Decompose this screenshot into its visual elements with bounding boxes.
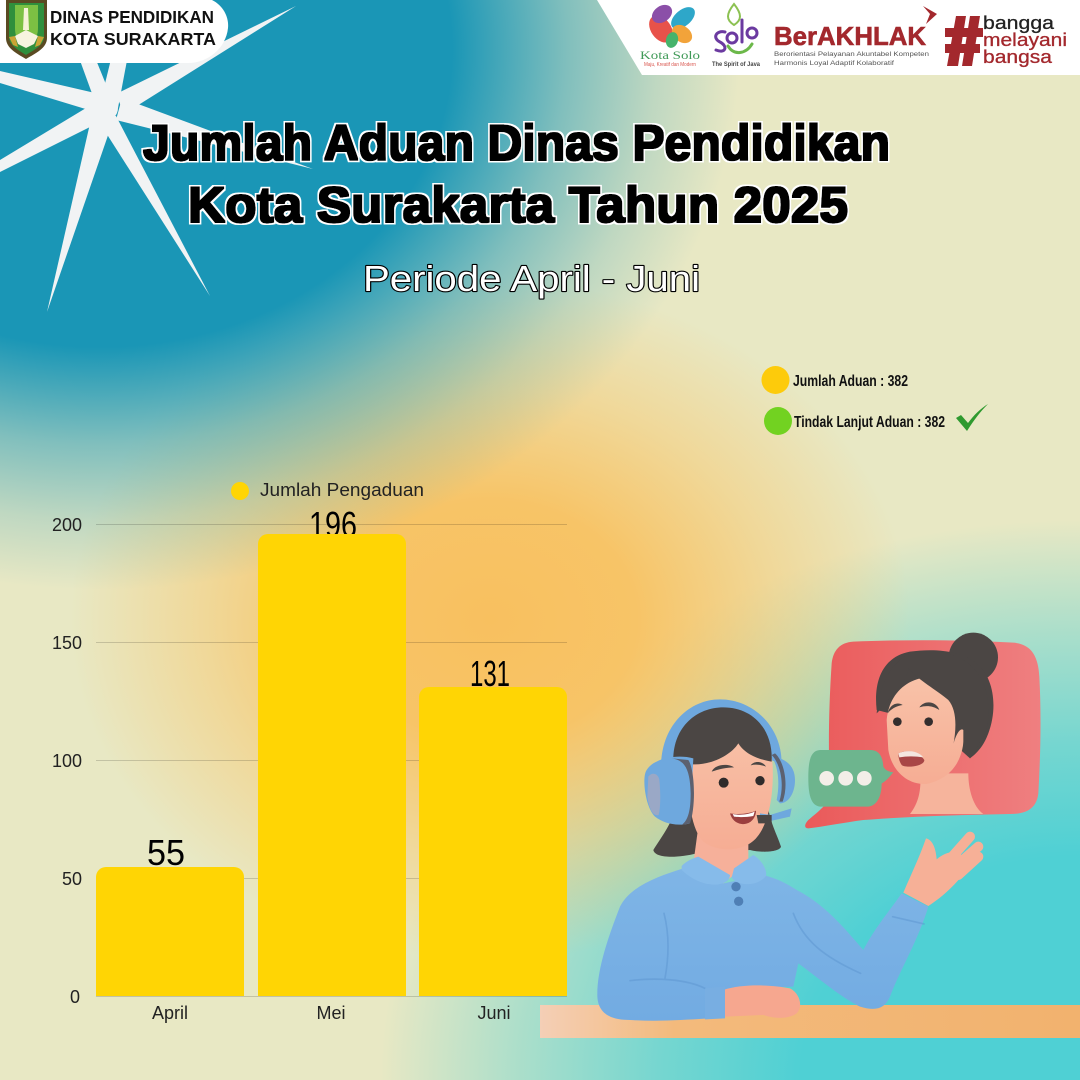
value labels: 131 [470, 653, 510, 694]
speech bubble: green typing [808, 750, 893, 807]
logo: Kota Solo: Maju, Kreatif dan Modern [644, 62, 696, 68]
headset earcups [644, 753, 795, 825]
icon: Surakarta coat of arms [6, 0, 47, 59]
bar chart [52, 480, 567, 1023]
operator eyes, brows [712, 762, 766, 788]
customer hair back and bun [876, 633, 998, 758]
customer ear [962, 721, 982, 753]
illustration: call centre conversation [597, 633, 1041, 1021]
bar: Mei 196 [258, 534, 406, 996]
legend: jumlah aduan [762, 366, 908, 394]
logo: BerAKHLAK: BerAKHLAK [774, 21, 926, 51]
logo: BerAKHLAK [774, 6, 937, 67]
customer mouth [898, 751, 924, 767]
agency name [50, 7, 216, 49]
operator neck [693, 827, 748, 883]
logo: Solo The Spirit of Java [712, 4, 761, 68]
header panel: Dinas Pendidikan [0, 0, 228, 63]
logo: BerAKHLAK: Harmonis Loyal Adaptif Kolaboratif [774, 60, 894, 67]
logo: bangga melayani bangsa [945, 12, 1067, 67]
summary legend [762, 366, 988, 435]
value labels: 196 [309, 504, 357, 545]
x axis labels: Mei [316, 1003, 346, 1023]
operator hair back [653, 800, 781, 857]
title: Kota Surakarta Tahun 2025 [188, 177, 848, 233]
customer eyes and brows [888, 702, 939, 726]
y axis labels: 100 [52, 751, 82, 771]
starburst decoration [0, 6, 313, 312]
value labels: 55 [147, 832, 185, 873]
customer face [887, 678, 964, 784]
logo: bangga melayani bangsa: melayani [983, 29, 1067, 50]
operator shirt [597, 868, 928, 1021]
logo: BerAKHLAK: Berorientasi Pelayanan Akuntabel Kompeten [774, 51, 929, 58]
operator headset band [661, 699, 782, 777]
shirt buttons [731, 882, 743, 906]
title: Jumlah Aduan Dinas Pendidikan [143, 115, 890, 171]
legend: tindak lanjut: Tindak Lanjut Aduan : 382 [794, 414, 945, 431]
value labels [147, 504, 510, 873]
title [143, 115, 890, 233]
legend: jumlah aduan: Jumlah Aduan : 382 [793, 373, 908, 390]
agency name: KOTA SURAKARTA [50, 29, 216, 49]
operator hair front [673, 707, 772, 793]
x axis labels: April [152, 1003, 188, 1023]
customer neck [910, 773, 983, 814]
logo: Kota Solo [640, 1, 700, 68]
y axis labels: 0 [70, 987, 80, 1007]
shirt cuff [705, 987, 725, 1019]
agency name: DINAS PENDIDIKAN [50, 7, 214, 27]
icon: check mark [956, 404, 988, 431]
table [540, 1005, 1080, 1038]
header panel: partner logos [597, 0, 1080, 75]
operator [597, 699, 978, 1021]
y axis labels [52, 515, 82, 1007]
y axis labels: 50 [62, 869, 82, 889]
operator face [687, 723, 773, 849]
logo: bangga melayani bangsa: bangsa [983, 46, 1053, 67]
operator smile [730, 811, 756, 824]
logo: Solo The Spirit of Java: The Spirit of Java [712, 62, 761, 68]
speech bubble: red with customer [805, 633, 1041, 828]
bar: Juni 131 [419, 687, 567, 996]
raised hand [903, 837, 978, 906]
bar: April 55 [96, 867, 244, 996]
y axis labels: 200 [52, 515, 82, 535]
shirt fold lines [630, 913, 924, 988]
logo: Kota Solo: Kota Solo [640, 48, 700, 62]
y axis gridlines [96, 524, 567, 996]
y axis labels: 150 [52, 633, 82, 653]
resting hand [723, 985, 800, 1018]
logo: bangga melayani bangsa: bangga [983, 12, 1055, 33]
x axis labels: Juni [477, 1003, 511, 1023]
legend: tindak lanjut [764, 407, 945, 435]
chart legend: Jumlah Pengaduan [260, 480, 424, 500]
subtitle: Periode April - Juni [363, 258, 700, 299]
x axis labels [152, 1003, 511, 1023]
customer hair front [877, 652, 989, 758]
shirt collar [682, 855, 766, 885]
